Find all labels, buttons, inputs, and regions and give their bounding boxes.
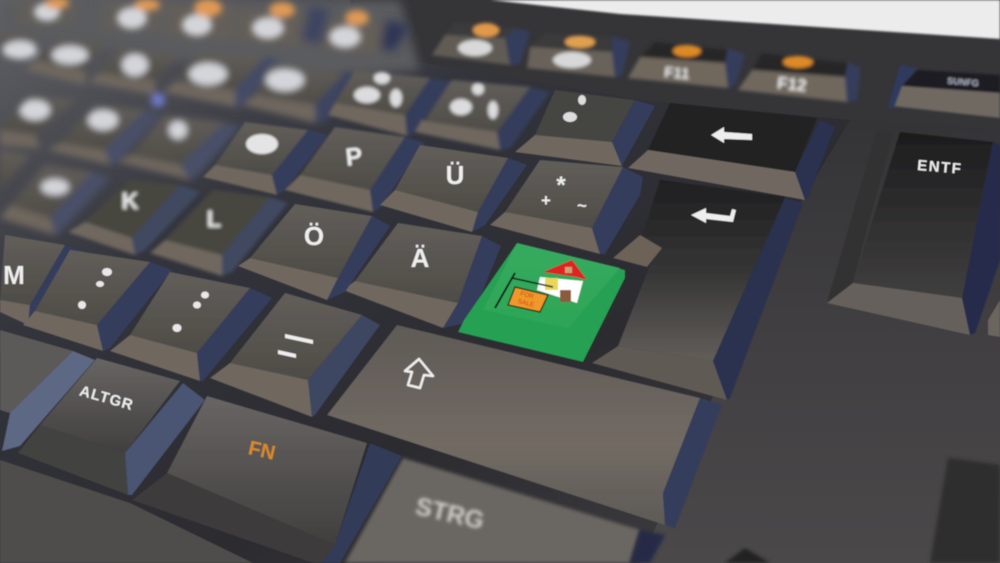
white desk strip at top bbox=[490, 0, 1000, 39]
key L bbox=[150, 190, 288, 276]
blurred legends bbox=[3, 3, 361, 195]
icon: backspace arrow bbox=[711, 127, 752, 143]
far-left key M bbox=[0, 235, 85, 325]
key K bbox=[68, 180, 200, 255]
key P bbox=[285, 127, 425, 212]
key O bbox=[203, 122, 328, 195]
letter row far keys bbox=[0, 95, 240, 235]
key star plus tilde: ~ bbox=[577, 196, 587, 215]
status light bbox=[151, 93, 165, 107]
icon: shift arrow bbox=[405, 359, 433, 388]
key ALTGR bbox=[18, 358, 205, 495]
key enter bbox=[592, 180, 803, 400]
key Ä: Ä bbox=[411, 243, 430, 273]
key spacebar bbox=[0, 460, 253, 563]
key SUNFG top right bbox=[888, 65, 1000, 118]
icon: house bbox=[537, 260, 587, 303]
key shift bbox=[327, 325, 722, 528]
key L: L bbox=[207, 206, 221, 233]
orange function legends bbox=[45, 0, 369, 26]
key F10 bbox=[527, 33, 630, 77]
key ENTF: ENTF bbox=[917, 157, 963, 178]
key star plus tilde bbox=[490, 160, 643, 254]
key with for sale icon bbox=[458, 243, 625, 362]
key FN: FN bbox=[246, 437, 277, 465]
icon: for sale sign: FOR bbox=[519, 290, 535, 301]
number keys near bbox=[328, 70, 550, 150]
right lower edge key bbox=[930, 458, 1000, 563]
key semicolon comma bbox=[23, 250, 172, 351]
key row O and P bbox=[203, 122, 425, 212]
key ALTGR: ALTGR bbox=[78, 383, 136, 414]
icon: for sale sign: SALE bbox=[517, 298, 535, 309]
icon: enter arrow bbox=[691, 208, 736, 223]
key F11: F11 bbox=[664, 64, 690, 83]
key Ü: Ü bbox=[446, 160, 464, 190]
key STRG bbox=[345, 458, 665, 563]
key Ö: Ö bbox=[304, 221, 324, 251]
number row keys bbox=[0, 30, 358, 123]
key F9 bbox=[432, 22, 530, 65]
key ENTF bbox=[827, 130, 1000, 337]
key P: P bbox=[344, 142, 364, 172]
key SUNFG top right: SUNFG bbox=[947, 76, 979, 88]
key star plus tilde: * bbox=[556, 172, 566, 199]
key F12 bbox=[738, 53, 860, 102]
key F12: F12 bbox=[776, 74, 808, 95]
key Ü bbox=[380, 145, 527, 232]
key colon period bbox=[110, 272, 272, 381]
far-left key M: M bbox=[3, 260, 25, 290]
key hash left of backspace bbox=[515, 90, 655, 166]
key left modifier bbox=[0, 330, 95, 451]
blurred distant keys bbox=[15, 0, 410, 55]
function keys F9 to F12 bbox=[432, 22, 860, 102]
key Ö bbox=[238, 204, 390, 300]
key K: K bbox=[121, 188, 139, 215]
key minus equals bbox=[210, 293, 380, 417]
icon: for sale sign bbox=[495, 273, 553, 312]
key FN bbox=[132, 396, 402, 563]
key Ä bbox=[343, 223, 501, 328]
key STRG: STRG bbox=[413, 493, 487, 535]
key star plus tilde: + bbox=[541, 191, 551, 210]
key F11 bbox=[628, 42, 745, 88]
function keys far left bbox=[15, 0, 410, 55]
key backspace bbox=[628, 103, 835, 200]
